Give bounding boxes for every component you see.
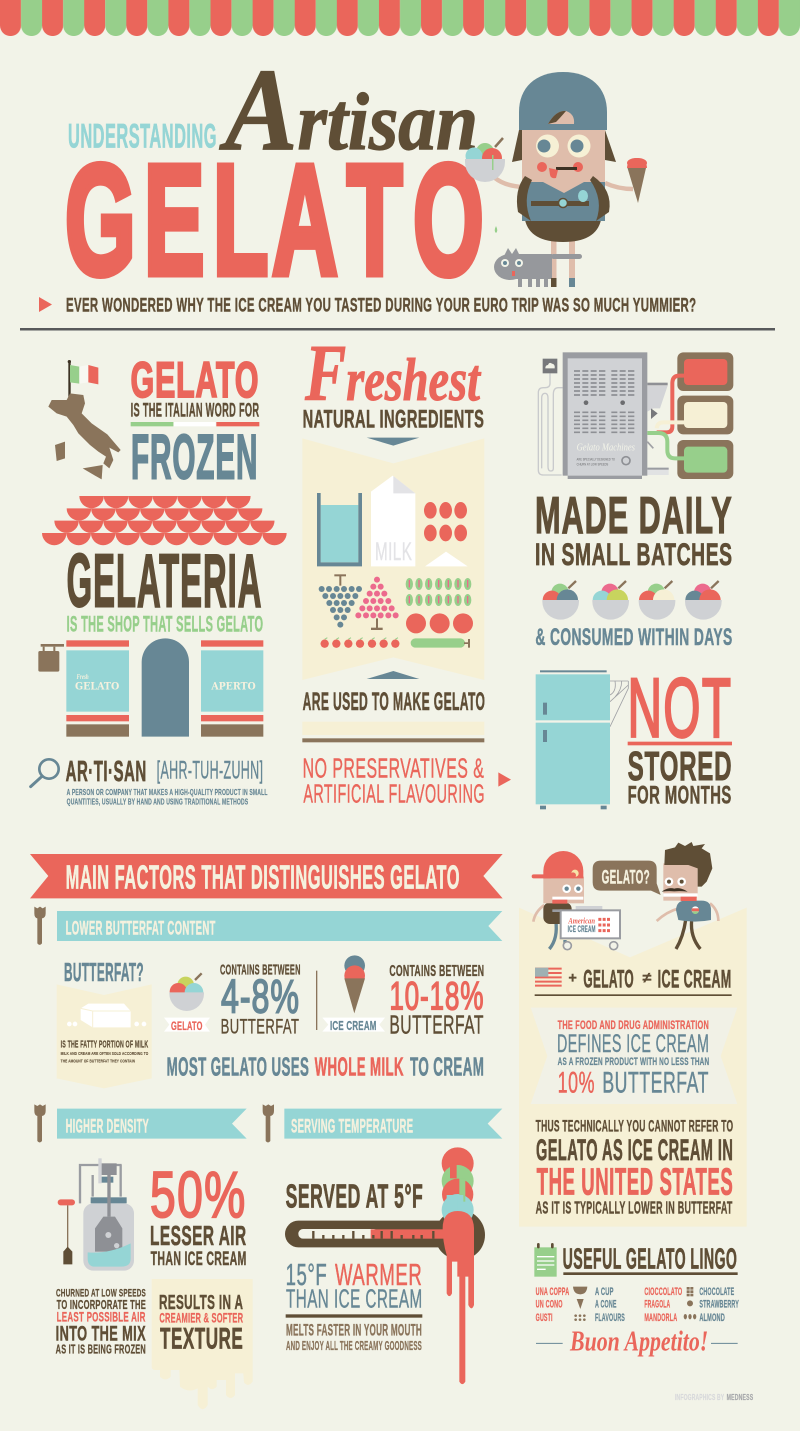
text: warmer — [286, 1258, 422, 1292]
panel: left column: IS THE ITALIAN WORD FOR — [131, 400, 259, 421]
text: no preservatives: NO PRESERVATIVES & — [303, 753, 484, 784]
text: warmer: 15°F — [286, 1258, 327, 1292]
machine label: Gelato Machines — [577, 442, 635, 453]
text: whole milk: MOST GELATO USES — [167, 1052, 309, 1082]
icon: grapes — [319, 574, 362, 628]
text: than ice cream: THAN ICE CREAM — [286, 1286, 423, 1314]
panel: main factors: CONTAINS BETWEEN — [220, 961, 301, 978]
shorts — [525, 220, 601, 242]
heading: gelato: GELATO — [131, 352, 259, 408]
panel: left column: [AHR-TUH-ZUHN] — [157, 756, 263, 784]
icon: drip — [495, 226, 497, 233]
stat: gelato butterfat: 4-8% — [221, 971, 300, 1024]
icon: oranges — [406, 613, 473, 633]
panel: melting texture: CREAMIER & SOFTER — [159, 1310, 243, 1325]
panel: gelato lingo: STRAWBERRY — [699, 1299, 739, 1311]
eyes — [536, 134, 590, 158]
ribbon: serving temperature: SERVING TEMPERATURE — [291, 1116, 413, 1137]
arms — [495, 178, 633, 189]
cream panel — [519, 908, 747, 1227]
list: italian flavours: FRAGOLA — [644, 1299, 670, 1311]
panel: butterfat definition: MILK AND CREAM ARE OFTEN SOLD ACCORDING TO — [61, 1051, 148, 1056]
panel: natural ingredients — [302, 330, 511, 808]
icon: spoon — [34, 1104, 46, 1142]
icon: cat — [494, 248, 582, 287]
arrow right — [498, 772, 511, 787]
stat: ice cream butterfat: 10-18% — [389, 975, 484, 1019]
shop front — [66, 638, 263, 737]
icon: spoon — [263, 1104, 274, 1142]
stat: ice cream butterfat: CONTAINS BETWEEN — [389, 963, 484, 980]
door — [142, 638, 189, 737]
equation: us plus gelato not ice cream: GELATO — [583, 966, 634, 993]
panel: gelato lingo: CIOCCOLATO — [644, 1286, 682, 1298]
awning stripes — [0, 0, 800, 36]
speech bubble — [593, 861, 661, 895]
arrow up — [367, 671, 419, 679]
ribbon: lower butterfat content: LOWER BUTTERFAT CONTENT — [66, 918, 216, 939]
panel: melting texture — [152, 1279, 253, 1409]
icon: cobweb — [610, 681, 628, 727]
legs — [551, 240, 575, 280]
title: gelato: GELATO — [65, 133, 484, 308]
icon: pistachios — [406, 578, 471, 606]
list: english flavours — [699, 1286, 739, 1324]
icon: berries — [355, 577, 399, 630]
list: italian flavours: MANDORLA — [644, 1312, 677, 1324]
outlet — [543, 359, 557, 373]
icon: thermometer — [285, 1210, 485, 1260]
text: conclusion — [536, 1117, 733, 1217]
heading: served at 5f: SERVED AT 5°F — [286, 1179, 423, 1216]
panel: density and temperature — [34, 1104, 502, 1409]
icon: italy map — [48, 393, 121, 479]
power cord — [538, 373, 563, 475]
icon: ice cream cone — [344, 955, 365, 1013]
list: italian terms — [536, 1286, 569, 1324]
icon: fridge — [536, 670, 610, 809]
panel: made daily — [535, 352, 733, 809]
text: GELATERIA — [67, 539, 262, 623]
text: lesser air: LESSER AIR — [150, 1220, 247, 1251]
title block: UNDERSTANDING — [68, 117, 217, 155]
cheeks and mouth — [537, 162, 583, 178]
definition: A PERSON OR COMPANY THAT MAKES A HIGH-QUALITY PRODUCT IN SMALL — [67, 787, 268, 797]
icon: gelato machine — [538, 352, 669, 479]
vents — [574, 371, 635, 432]
icon: churn — [58, 1158, 134, 1271]
stat: 50%: 50% — [150, 1158, 247, 1231]
ribbon: ice cream — [322, 1018, 385, 1033]
ribbon: higher density: HIGHER DENSITY — [66, 1116, 149, 1137]
panel: gelato lingo: UNA COPPA — [536, 1286, 569, 1298]
icons: cup cone flavours — [573, 1287, 587, 1321]
title: artisan: Artisan — [219, 44, 478, 175]
character: vendor — [532, 851, 584, 949]
text: than ice cream: THAN ICE CREAM — [151, 1249, 247, 1270]
list: italian terms: GUSTI — [536, 1312, 553, 1324]
equation: us plus gelato not ice cream — [568, 966, 732, 993]
icon: bowl 1 — [542, 581, 579, 620]
icon: gelato bowl — [169, 973, 204, 1011]
shirt — [522, 180, 605, 221]
icon: butter — [67, 1004, 146, 1027]
panel: left column — [31, 352, 287, 806]
tubs — [647, 352, 733, 479]
cart — [552, 906, 620, 950]
text: melts faster — [286, 1321, 422, 1353]
icon: melting scoops — [442, 1147, 474, 1384]
script: buon appetito: Buon Appetito! — [569, 1326, 708, 1357]
panel: main factors: BUTTERFAT? — [64, 959, 144, 987]
text: churned: CHURNED AT LOW SPEEDS — [56, 1288, 146, 1300]
face — [522, 130, 605, 193]
stat: ice cream butterfat — [389, 963, 484, 1039]
icon: milk carton — [371, 476, 415, 566]
sign: fresh gelato: Fresh — [77, 672, 89, 681]
panel: gelato lingo: FLAVOURS — [595, 1312, 625, 1324]
icon: apples — [320, 638, 399, 648]
icon: eggs — [424, 502, 467, 541]
icon: spoon — [34, 907, 46, 945]
list: italian terms: UN CONO — [536, 1299, 563, 1311]
hanging sign — [38, 644, 64, 672]
text: churned: INTO THE MIX — [56, 1322, 146, 1346]
definition: QUANTITIES, USUALLY BY HAND AND USING TRADITIONAL METHODS — [67, 796, 248, 806]
equation: us plus gelato not ice cream: ICE CREAM — [658, 966, 732, 993]
icon: magnifier — [31, 759, 59, 787]
backpack straps — [517, 176, 610, 221]
term: artisan: AR·TI·SAN — [66, 756, 147, 788]
icon: us flag — [535, 968, 562, 986]
text: churned — [56, 1288, 146, 1356]
panel: butterfat definition: IS THE FATTY PORTION OF MILK — [61, 1039, 149, 1050]
ribbon: ice cream: ICE CREAM — [330, 1018, 377, 1033]
character: gelato eater — [465, 72, 647, 287]
shop roof — [42, 496, 287, 545]
panel: left column: IS THE SHOP THAT SELLS GELATO — [67, 611, 263, 636]
ribbon: fda definition: 10% — [558, 1066, 595, 1099]
panel: density and temperature: MELTS FASTER IN YOUR MOUTH — [286, 1321, 422, 1340]
panel: main factors — [30, 854, 503, 1088]
panel: left column: FROZEN — [131, 423, 258, 493]
text: for months: FOR MONTHS — [628, 781, 732, 809]
text: churned: LEAST POSSIBLE AIR — [57, 1310, 146, 1325]
panel: natural ingredients: ARE USED TO MAKE GELATO — [303, 688, 485, 716]
icon: bowl 4 — [685, 581, 722, 620]
icon: glass of water — [317, 493, 362, 566]
credit: INFOGRAPHICS BY — [675, 1392, 724, 1402]
definition — [67, 787, 268, 806]
character: italian — [657, 842, 718, 949]
text: churned: TO INCORPORATE THE — [57, 1298, 146, 1312]
icon: gelato bowl — [465, 138, 505, 182]
icon: sugar — [425, 552, 468, 566]
icon: notepad — [534, 1243, 557, 1277]
dispenser — [647, 383, 669, 475]
ribbon: higher density — [57, 1109, 247, 1139]
tagline arrow — [39, 297, 52, 312]
list: english terms — [595, 1286, 625, 1324]
panel: density and temperature: AND ENJOY ALL THE CREAMY GOODNESS — [286, 1338, 422, 1353]
cart: American — [568, 916, 595, 925]
speech bubble: GELATO? — [602, 866, 650, 888]
list: english flavours: ALMOND — [699, 1312, 725, 1324]
icon: gelato machine: CHURN AT LOW SPEEDS — [577, 461, 608, 466]
heading: stored: STORED — [628, 743, 732, 789]
banner: main factors — [30, 854, 503, 898]
cream bar — [302, 722, 484, 735]
cap — [519, 72, 607, 130]
stat: gelato butterfat: BUTTERFAT — [221, 1014, 299, 1038]
ribbon: serving temperature — [284, 1109, 502, 1139]
equation: us plus gelato not ice cream: + — [568, 971, 577, 987]
cream panel — [302, 438, 484, 680]
icon: milk carton: MILK — [375, 538, 412, 566]
ribbon: gelato: GELATO — [171, 1019, 203, 1033]
icon: bowl 2 — [592, 581, 629, 620]
icons: chocolate strawberry almond — [684, 1287, 696, 1319]
heading: natural ingredients: NATURAL INGREDIENTS — [303, 405, 484, 433]
panel: america vs gelato — [519, 842, 747, 1227]
list: italian flavours — [644, 1286, 682, 1324]
credit: MEDNESS — [727, 1392, 753, 1402]
icon: bowl 3 — [639, 581, 675, 620]
text: whole milk: TO CREAM — [410, 1052, 484, 1082]
panel: melting texture: RESULTS IN A — [159, 1292, 243, 1314]
equation: us plus gelato not ice cream: ≠ — [642, 971, 652, 987]
text: whole milk: WHOLE MILK — [315, 1052, 404, 1082]
panel: melting texture: TEXTURE — [160, 1322, 243, 1355]
text: warmer: WARMER — [335, 1258, 422, 1292]
ribbon: fda definition — [531, 1008, 737, 1104]
stat: ice cream butterfat: BUTTERFAT — [389, 1009, 484, 1039]
text: churned: AS IT IS BEING FROZEN — [56, 1342, 146, 1356]
icon: gelato machine: ARE SPECIALLY DESIGNED TO — [577, 456, 615, 461]
tricolor rule — [131, 422, 259, 426]
icon: cucumber — [411, 638, 470, 648]
title block — [65, 44, 484, 308]
shop front: GELATO — [75, 679, 119, 692]
panel: butterfat definition — [57, 984, 152, 1088]
script heading: freshest: Freshest — [304, 330, 482, 418]
ribbon: gelato — [164, 1018, 210, 1033]
ribbon: fda definition: BUTTERFAT — [602, 1066, 709, 1099]
panel: butterfat definition: THE AMOUNT OF BUTTERFAT THEY CONTAIN — [61, 1058, 135, 1063]
sign: aperto: APERTO — [210, 679, 256, 692]
icon: flag — [68, 360, 98, 399]
list: english flavours: CHOCOLATE — [699, 1286, 734, 1298]
cart: ICE CREAM — [568, 924, 596, 934]
ribbon: lower butterfat content — [57, 911, 502, 941]
stat: gelato butterfat — [220, 961, 301, 1038]
list: english terms: A CONE — [595, 1299, 617, 1311]
panel: gelato lingo — [534, 1243, 753, 1402]
icon: ice cream cone — [627, 158, 647, 203]
text: artificial flavouring: ARTIFICIAL FLAVOURING — [303, 778, 485, 808]
hair — [512, 130, 616, 162]
list: english terms: A CUP — [595, 1286, 614, 1298]
arrow down — [367, 438, 419, 446]
